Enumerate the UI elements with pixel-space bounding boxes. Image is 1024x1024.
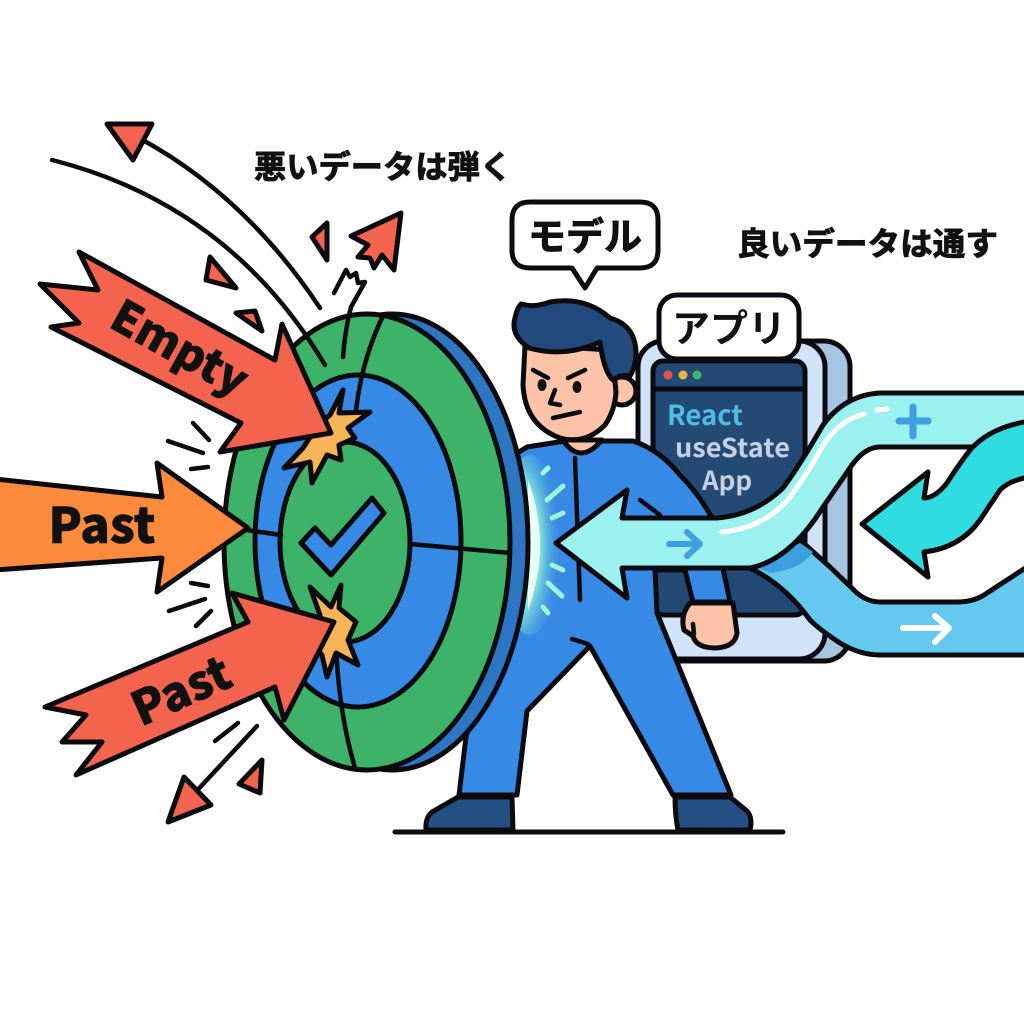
heading: good data passes: 良いデータは通す [737,219,998,265]
check mark [301,498,384,575]
app screen: App [701,461,752,498]
ear [608,377,636,405]
arrow: Empty rejected [40,252,331,452]
app screen: useState [675,428,790,465]
blue jumpsuit [459,441,731,795]
panel: app window device [638,341,850,661]
speech bubble: model: モデル [528,206,642,261]
arrow: Past red: Past [119,635,241,740]
deflected arrow: lower [168,723,257,822]
deflected trail: long curve [52,160,325,365]
app screen [653,361,805,615]
debris triangle 1 [206,257,236,288]
person: model character holding shield [426,301,751,830]
boots [426,797,751,830]
impact lines: top [168,423,209,469]
shield: concentric validation target [224,314,528,770]
flow: cyan return arrow [862,421,1024,577]
deflected arrow: upper [107,124,320,308]
label: app [659,295,799,359]
debris triangle 3 [236,311,262,331]
burst: top impact [284,390,370,483]
arrow: Past orange [0,463,248,592]
blue arrow on flow [669,532,700,556]
app screen: React [667,394,743,434]
hair [514,301,636,380]
heading: bad data is rejected: 悪いデータは弾く [254,142,512,188]
debris triangle 4 [239,760,262,793]
broken arrow shard [351,213,401,270]
arrow: Past orange: Past [48,487,156,558]
fist [683,603,737,648]
white arrow [903,616,949,642]
flow: lower blue stream [750,540,1024,655]
plus sign [899,407,928,436]
flow: upper good data arrow [556,393,1024,598]
label: app: アプリ [672,298,786,353]
face [523,345,616,440]
burst: bottom impact [310,585,358,677]
arrow: Empty rejected: Empty [101,281,262,409]
debris triangle 2 [312,223,327,260]
flow highlight [722,409,887,532]
speech bubble: model [512,202,658,288]
broken arrow shaft [334,270,365,357]
impact lines: middle [169,583,211,626]
arm and seam lines [572,458,660,644]
ground line [395,830,783,834]
arrow: Past red [45,593,334,775]
neck [563,440,602,453]
shield glow [498,455,563,635]
facial features [533,370,585,418]
